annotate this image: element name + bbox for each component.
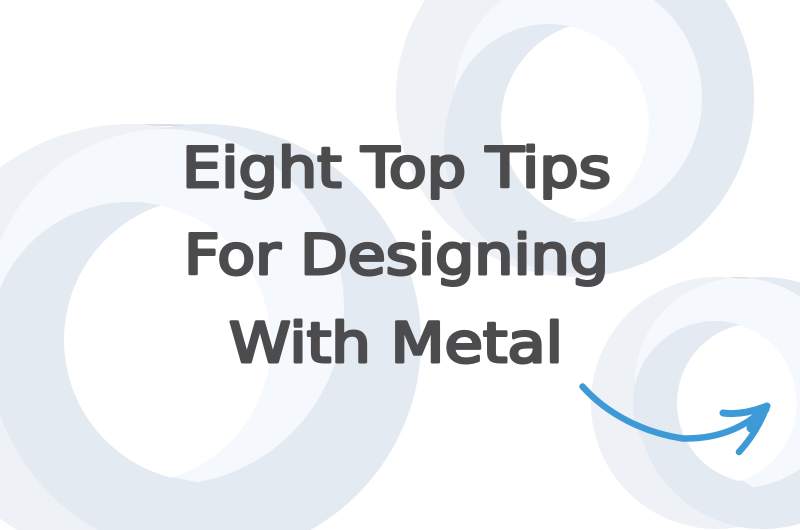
icon: blue curved arrow [579, 383, 770, 456]
title line 2: For Designing [184, 223, 609, 287]
decorative ring: top right [396, 0, 754, 277]
title line 1: Eight Top Tips [182, 136, 611, 200]
title [182, 136, 611, 375]
decorative ring: bottom right [591, 277, 800, 529]
decorative ring: large left [0, 124, 421, 530]
title line 3: With Metal [229, 311, 563, 375]
